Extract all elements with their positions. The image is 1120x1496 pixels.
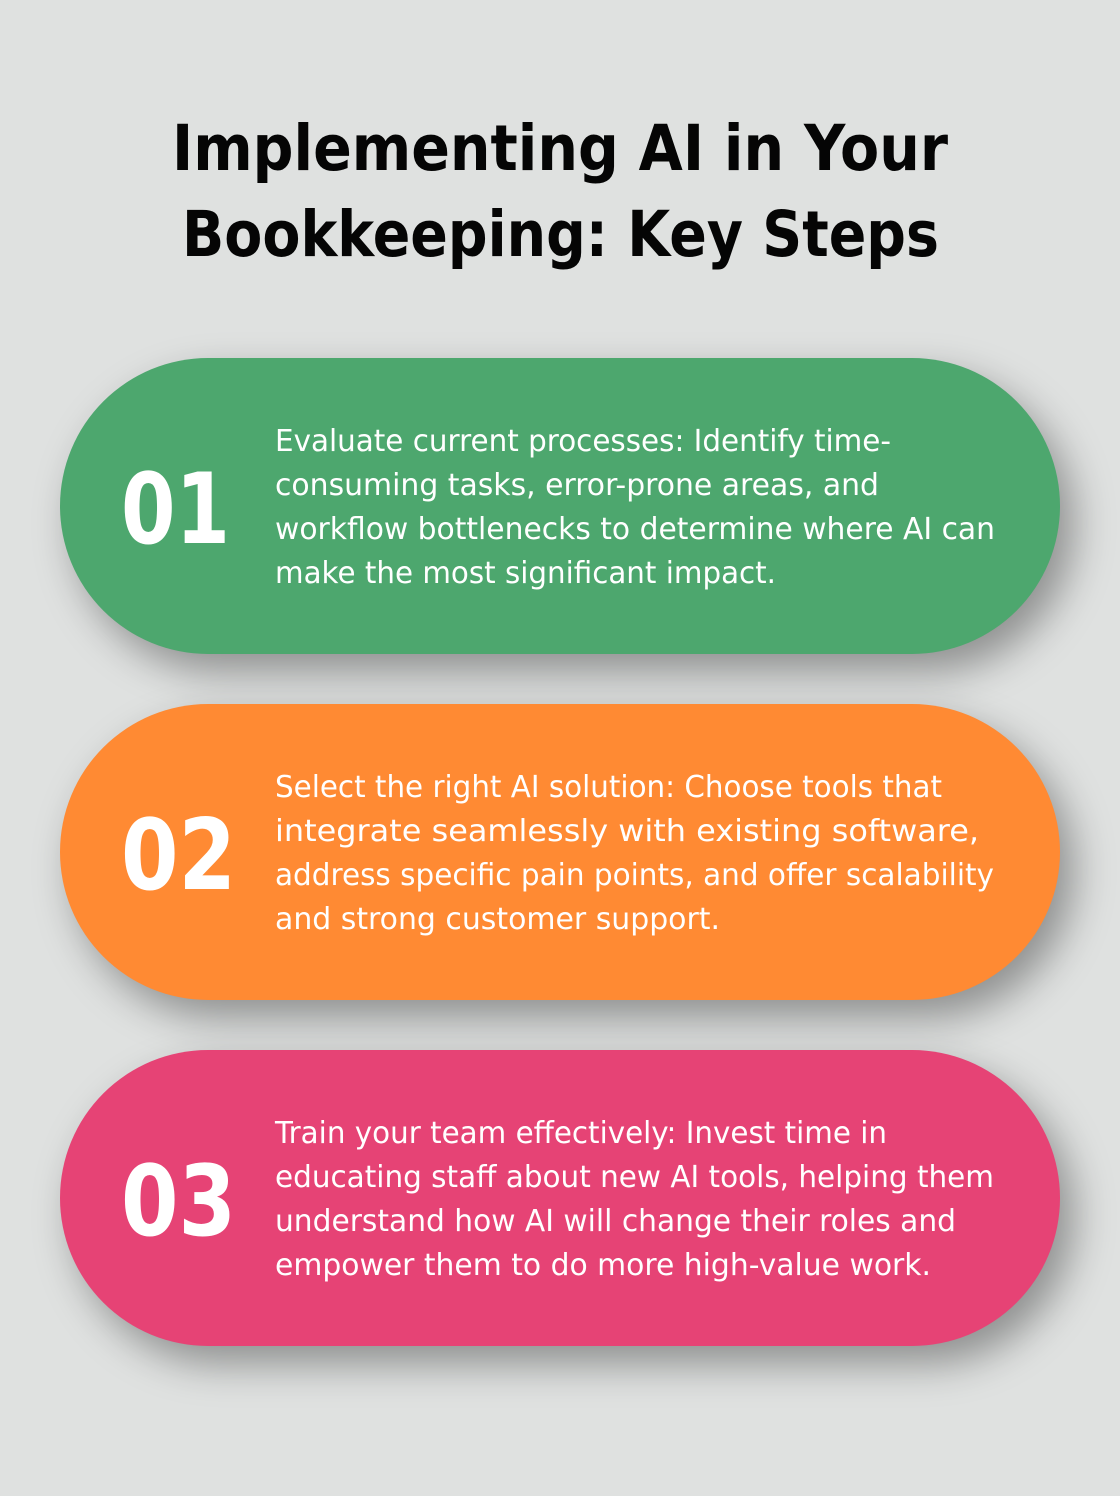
text block: step 02 description [275,770,994,937]
text block: step 01 description: consuming tasks, error-prone areas, and [275,468,879,503]
title: Implementing AI in Your [172,112,948,185]
title: Bookkeeping: Key Steps [182,198,939,271]
number 03: 03 [121,1145,236,1259]
title [172,112,948,271]
text block: step 01 description: workflow bottlenecks to determine where AI can [275,512,995,547]
text block: step 02 description: Select the right AI solution: Choose tools that [275,770,942,805]
text block: step 03 description: educating staff about new AI tools, helping them [275,1160,994,1195]
panel: step 01 [60,358,1060,654]
text block: step 02 description: and strong customer support. [275,902,720,937]
text block: step 03 description: understand how AI will change their roles and [275,1204,956,1239]
text block: step 03 description: Train your team effectively: Invest time in [274,1116,887,1151]
text block: step 02 description: integrate seamlessly with existing software, [275,814,979,849]
panel: step 03 [60,1050,1060,1346]
text block: step 03 description [274,1116,994,1283]
panel: step 02 [60,704,1060,1000]
text block: step 01 description: Evaluate current processes: Identify time- [275,424,891,459]
number 01: 01 [121,453,230,567]
text block: step 03 description: empower them to do more high-value work. [275,1248,931,1283]
text block: step 01 description [275,424,995,591]
text block: step 01 description: make the most significant impact. [275,556,776,591]
number 02: 02 [121,799,236,913]
text block: step 02 description: address specific pain points, and offer scalability [275,858,994,893]
